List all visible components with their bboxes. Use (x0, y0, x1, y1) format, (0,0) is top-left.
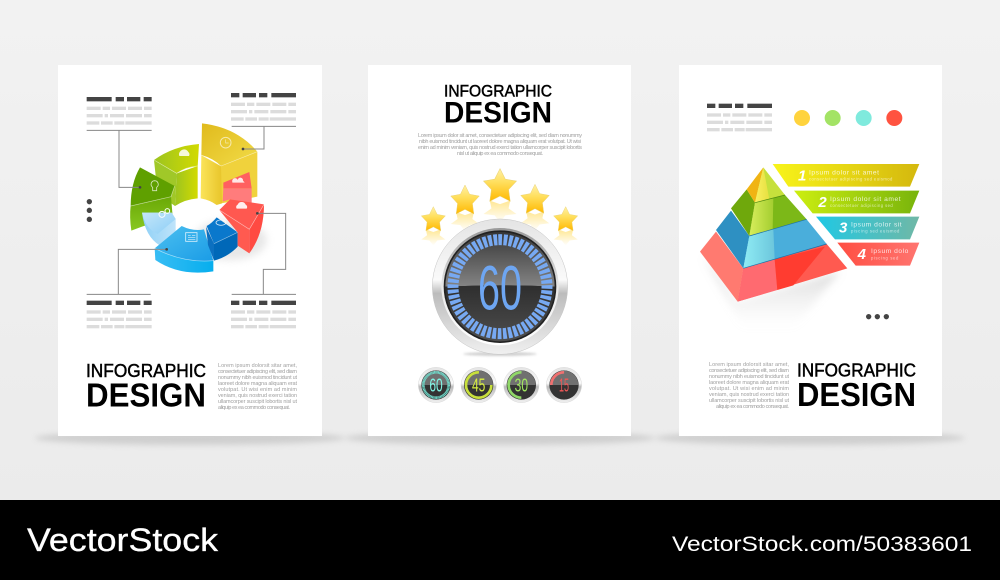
title: INFOGRAPHIC (86, 360, 206, 381)
pyramid shadow (703, 257, 840, 328)
banner 3 (816, 217, 919, 239)
paragraph: laoreet dolore magna aliquam erat (709, 380, 789, 386)
text block (707, 104, 772, 131)
footer logo: VectorStock (27, 522, 219, 558)
callout connectors (87, 126, 296, 294)
banner 2: 2 (817, 194, 827, 211)
small timer 15 (546, 367, 582, 403)
title: DESIGN (86, 378, 206, 415)
text block: bottom right (231, 301, 296, 328)
segment: dark green (130, 167, 175, 231)
paragraph: Lorem ipsum dolorsit sitar amet, (709, 362, 789, 368)
paragraph: aliquip ex ea commodo consequat. (716, 404, 789, 410)
paragraph: enim ad minim veniam, quis nostrud exerci tation ullamcorper suscipit lobortis (418, 145, 582, 151)
paragraph: nibh euismod tincidunt ut laoreet dolore magna aliquam erat volutpat. Ut wisi (419, 139, 581, 145)
title (797, 360, 916, 414)
banner 1: consectetuer adipiscing sed euismod (809, 177, 893, 182)
small timer 45 (461, 367, 496, 403)
banner 4: 4 (857, 246, 867, 263)
star rating (421, 169, 578, 246)
small timer 45: 45 (472, 375, 485, 396)
title: INFOGRAPHIC (797, 360, 916, 381)
paragraph: laoreet dolore magna aliquam erat (218, 381, 297, 387)
title: DESIGN (444, 96, 552, 129)
banner 3: piscing sed euismod (851, 229, 900, 234)
panel: middle poster (368, 65, 631, 436)
connector dots (139, 148, 259, 251)
paragraph (418, 133, 582, 157)
segment: light blue (142, 209, 176, 246)
banner 4 (837, 243, 919, 266)
paragraph (218, 363, 297, 411)
banner 4: Ipsum dolo (871, 248, 909, 255)
main timer: 60 (478, 253, 522, 323)
paragraph: aliquip ex ea commodo consequat. (218, 405, 290, 411)
panel shadows (35, 431, 965, 445)
paragraph: veniam, quis nostrud exerci tation (218, 393, 297, 399)
banner 3: Ipsum dolor sit (851, 222, 902, 229)
title (86, 360, 206, 415)
paragraph: nonummy nibh euismod tincidunt ut (218, 375, 297, 381)
text block: bottom left (87, 301, 152, 328)
banner 1 (773, 164, 919, 187)
three dots (87, 199, 92, 222)
pyramid tier: blue (716, 211, 827, 268)
small timer 60: 60 (429, 375, 443, 396)
title (444, 82, 552, 129)
donut chart and callouts (87, 93, 296, 328)
pyramid tier: yellow (747, 167, 785, 203)
paragraph: consectetuer adipiscing elit, sed diam (709, 368, 789, 374)
pyramid tier: green (731, 189, 807, 236)
paragraph: consectetuer adipiscing elit, sed diam (218, 369, 297, 375)
small timer 15: 15 (559, 375, 569, 396)
panel: left poster (58, 65, 322, 436)
segment: blue (155, 226, 213, 273)
title: DESIGN (797, 377, 916, 414)
paragraph: volutpat. Ut wisi enim ad minim (218, 387, 297, 393)
title: INFOGRAPHIC (444, 82, 552, 101)
banner 4: piscing sed (871, 255, 899, 260)
pyramid tier: red (700, 232, 847, 302)
stars (421, 169, 578, 231)
paragraph: Lorem ipsum dolor sit amet, consectetuer adipiscing elit, sed diam nonummy (418, 133, 582, 139)
footer image id: VectorStock.com/50383601 (672, 532, 972, 556)
three dots (866, 314, 889, 319)
main timer (432, 219, 568, 354)
text block: top left (87, 97, 152, 125)
paragraph (709, 362, 789, 410)
paragraph: ullamcorper suscipit lobortis nisl ut (709, 398, 789, 404)
pyramid graphic (700, 104, 919, 328)
segment: yellow (201, 123, 257, 205)
banner 2 (794, 191, 919, 213)
segment: light green (154, 144, 199, 206)
paragraph: Lorem ipsum dolorsit sitar amet, (218, 363, 297, 369)
banner 2: consectetuer adipiscing sed (830, 203, 893, 208)
panel: right poster (679, 65, 942, 436)
footer bar (0, 500, 1000, 580)
banner 2: Ipsum dolor sit amet (830, 196, 901, 203)
colour dots (794, 110, 902, 126)
small timer 60 (418, 367, 454, 403)
paragraph: nonummy nibh euismod tincidunt ut (709, 374, 789, 380)
banner 1: Ipsum dolor sit amet (809, 170, 879, 177)
segment: big red (219, 199, 264, 253)
paragraph: veniam, quis nostrud exerci tation (709, 392, 789, 398)
paragraph: volutpat. Ut wisi enim ad minim (709, 386, 789, 392)
small timer 30 (504, 367, 539, 403)
segment: dark blue (206, 217, 238, 261)
paragraph: nisl ut aliquip ex ea commodo consequat. (457, 151, 543, 157)
banner 3: 3 (839, 220, 848, 237)
star reflections (421, 201, 578, 246)
text block: top right (231, 93, 296, 121)
banner 1: 1 (798, 168, 806, 185)
timer gauges (418, 219, 582, 403)
paragraph: ullamcorper suscipit lobortis nisl ut (218, 399, 297, 405)
small timer 30: 30 (515, 375, 528, 396)
segment: small red (223, 172, 252, 203)
